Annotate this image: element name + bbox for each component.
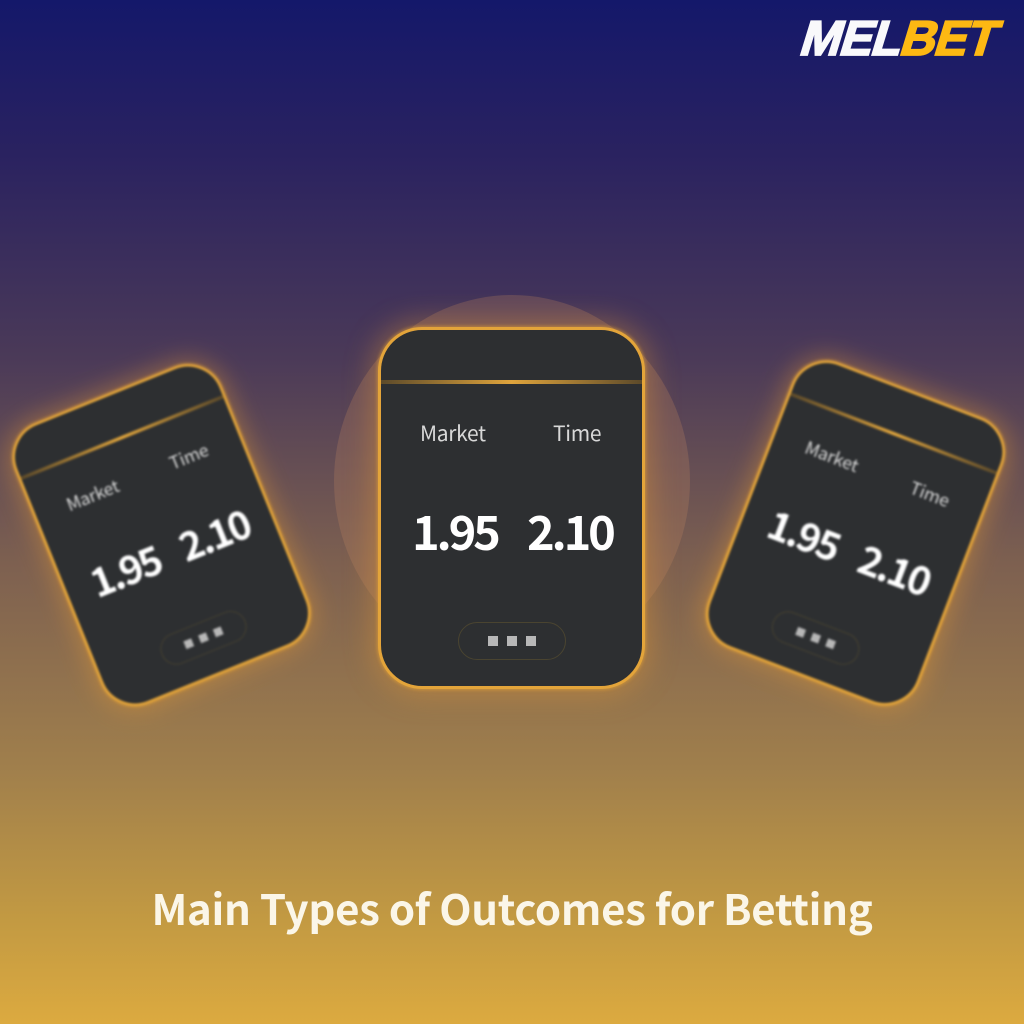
center card pill xyxy=(458,622,566,660)
left card odds 1.95: 1.95 xyxy=(80,529,168,609)
right card pill xyxy=(767,607,864,669)
center card Time label: Time xyxy=(553,418,601,448)
left card odds 2.10: 2.10 xyxy=(169,493,257,574)
center card odds 2.10: 2.10 xyxy=(527,495,613,564)
right card xyxy=(695,350,1016,716)
center card Market label: Market xyxy=(420,418,486,448)
left card pill xyxy=(156,606,251,669)
left card divider xyxy=(20,395,224,480)
left card xyxy=(2,353,321,717)
left card Market label: Market xyxy=(63,473,123,517)
logo: MELBET xyxy=(794,12,1006,66)
right card odds 2.10: 2.10 xyxy=(851,527,939,608)
title: Main Types of Outcomes for Betting xyxy=(151,877,873,938)
center card xyxy=(378,327,645,689)
right card Time label: Time xyxy=(906,475,954,513)
center card divider xyxy=(381,380,642,384)
left card Time label: Time xyxy=(165,437,212,476)
right card odds 1.95: 1.95 xyxy=(760,493,849,573)
right card Market label: Market xyxy=(801,434,862,478)
halo circle behind center card xyxy=(334,295,690,667)
right card divider xyxy=(790,393,997,475)
center card odds 1.95: 1.95 xyxy=(412,495,498,564)
